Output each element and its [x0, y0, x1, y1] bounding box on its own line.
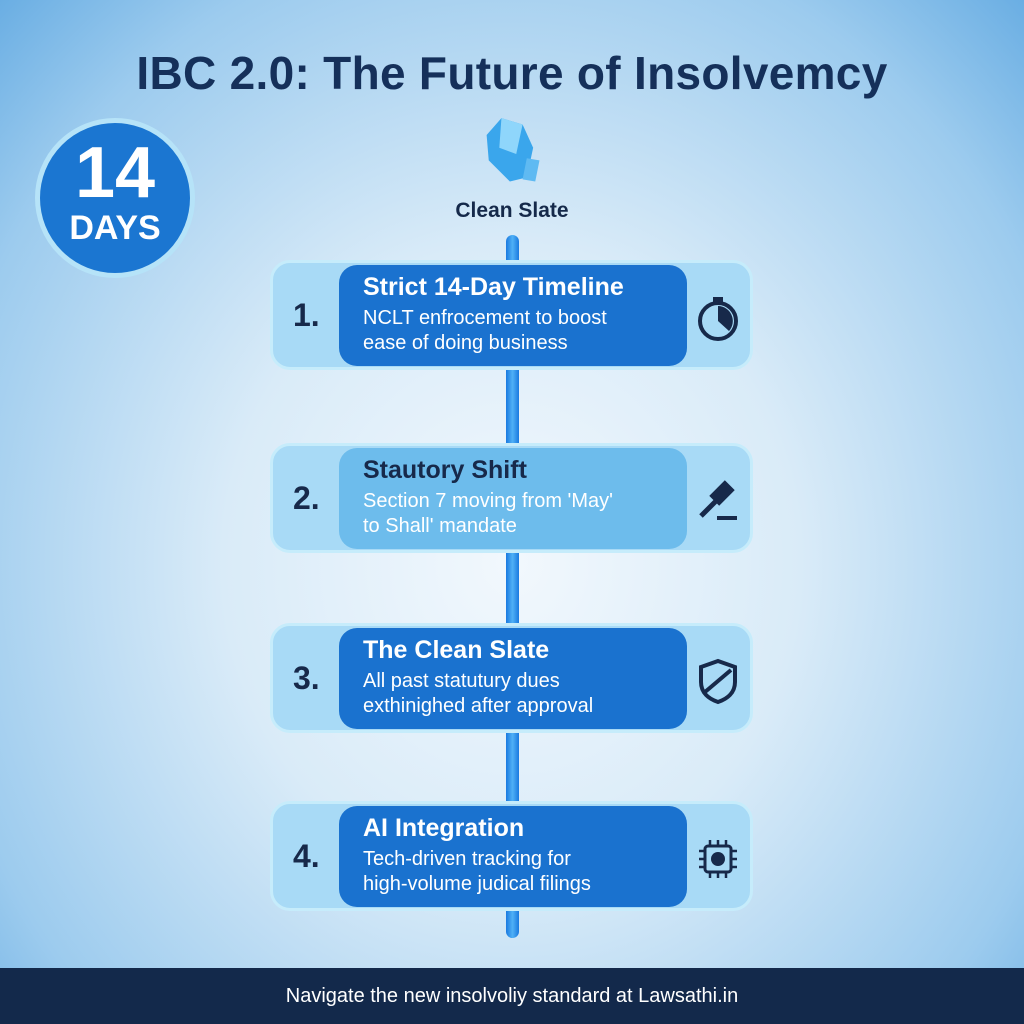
icon: gavel — [699, 480, 737, 520]
text box 2: to Shall' mandate — [363, 515, 517, 537]
number 1: 1. — [293, 297, 320, 333]
number 4: 4. — [293, 838, 320, 874]
icon: crystal — [486, 118, 540, 182]
text box 3: All past statutury dues — [363, 670, 560, 692]
text box 1 — [339, 265, 687, 366]
footer: Navigate the new insolvoliy standard at Lawsathi.in — [286, 985, 738, 1007]
footer — [0, 968, 1024, 1024]
badge: 14 days: DAYS — [69, 209, 161, 247]
icon: chip — [699, 840, 737, 878]
text box 3: exthinighed after approval — [363, 695, 593, 717]
icon: shield — [699, 658, 737, 704]
number 2: 2. — [293, 480, 320, 516]
title: IBC 2.0: The Future of Insolvemcy — [136, 47, 888, 99]
badge: 14 days — [35, 118, 195, 278]
text box 2 — [339, 448, 687, 549]
text box 1: ease of doing business — [363, 332, 568, 354]
text box 4: AI Integration — [363, 814, 524, 842]
card 3 — [270, 623, 753, 733]
number 3: 3. — [293, 660, 320, 696]
text box 2: Stautory Shift — [363, 456, 527, 484]
icon: stopwatch — [698, 297, 738, 341]
text box 3: The Clean Slate — [363, 636, 549, 664]
text box 2: Section 7 moving from 'May' — [363, 490, 613, 512]
text box 4 — [339, 806, 687, 907]
timeline line — [506, 235, 519, 938]
card 2 — [270, 443, 753, 553]
text box 1: NCLT enfrocement to boost — [363, 307, 607, 329]
text box 4: Tech-driven tracking for — [363, 848, 571, 870]
label: clean slate: Clean Slate — [455, 199, 569, 222]
card 1 — [270, 260, 753, 370]
text box 4: high-volume judical filings — [363, 873, 591, 895]
text box 3 — [339, 628, 687, 729]
text box 1: Strict 14-Day Timeline — [363, 273, 624, 301]
badge: 14 days: 14 — [75, 133, 155, 213]
card 4 — [270, 801, 753, 911]
